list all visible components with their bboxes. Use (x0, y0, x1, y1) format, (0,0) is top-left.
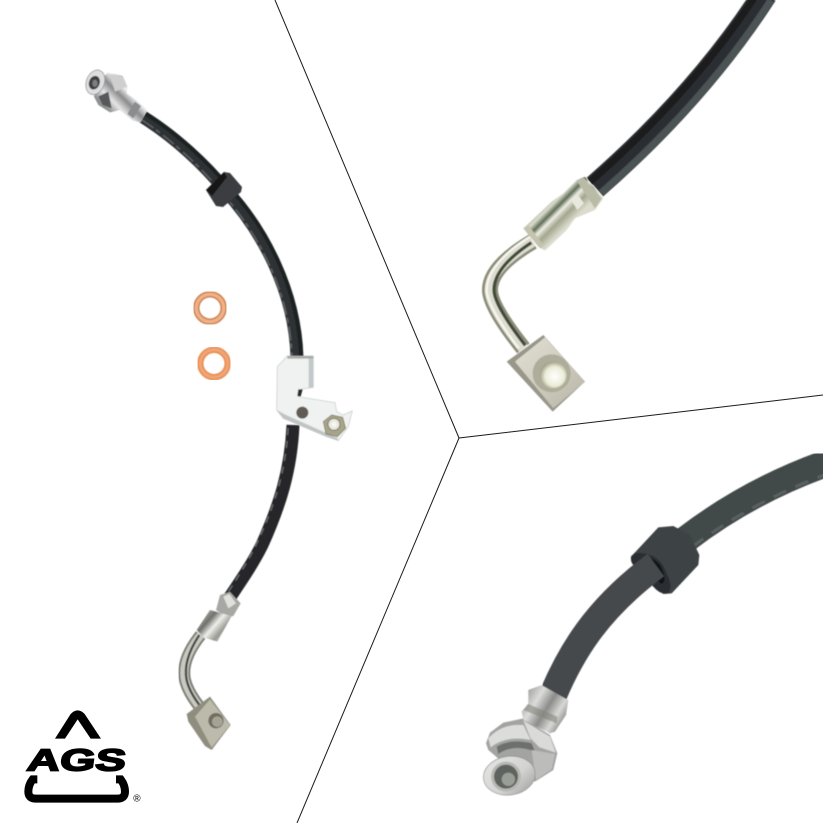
copper washer lower (200, 350, 228, 377)
crimp (522, 685, 568, 733)
hex banjo body (486, 718, 557, 782)
hose upper section (142, 114, 301, 357)
panel: detail of banjo fitting and collar (481, 462, 823, 798)
AGS logo (25, 710, 141, 805)
logo bottom bracket (28, 779, 125, 799)
bracket nut (323, 415, 346, 437)
bottom banjo tube fitting (184, 592, 241, 750)
logo wordmark: AGS (25, 742, 129, 777)
hose lower section (227, 425, 293, 597)
top banjo fitting (83, 67, 147, 123)
logo top chevron (55, 710, 101, 739)
hose rubber collar (206, 172, 242, 207)
panel: detail of tube fitting (487, 0, 771, 412)
rubber collar (631, 526, 699, 594)
mounting bracket (277, 356, 352, 441)
lower hose segment (553, 565, 656, 695)
crimped sleeve (523, 177, 603, 251)
square fitting block (507, 335, 585, 412)
bracket mounting hole (296, 407, 308, 419)
threaded end (481, 753, 538, 798)
registered mark: ® (133, 794, 141, 805)
upper hose segment (685, 462, 823, 547)
ribbed hose (590, 0, 771, 193)
panel: full brake hose assembly (83, 67, 352, 750)
copper washer upper (196, 294, 224, 322)
bent steel tube (487, 237, 533, 348)
